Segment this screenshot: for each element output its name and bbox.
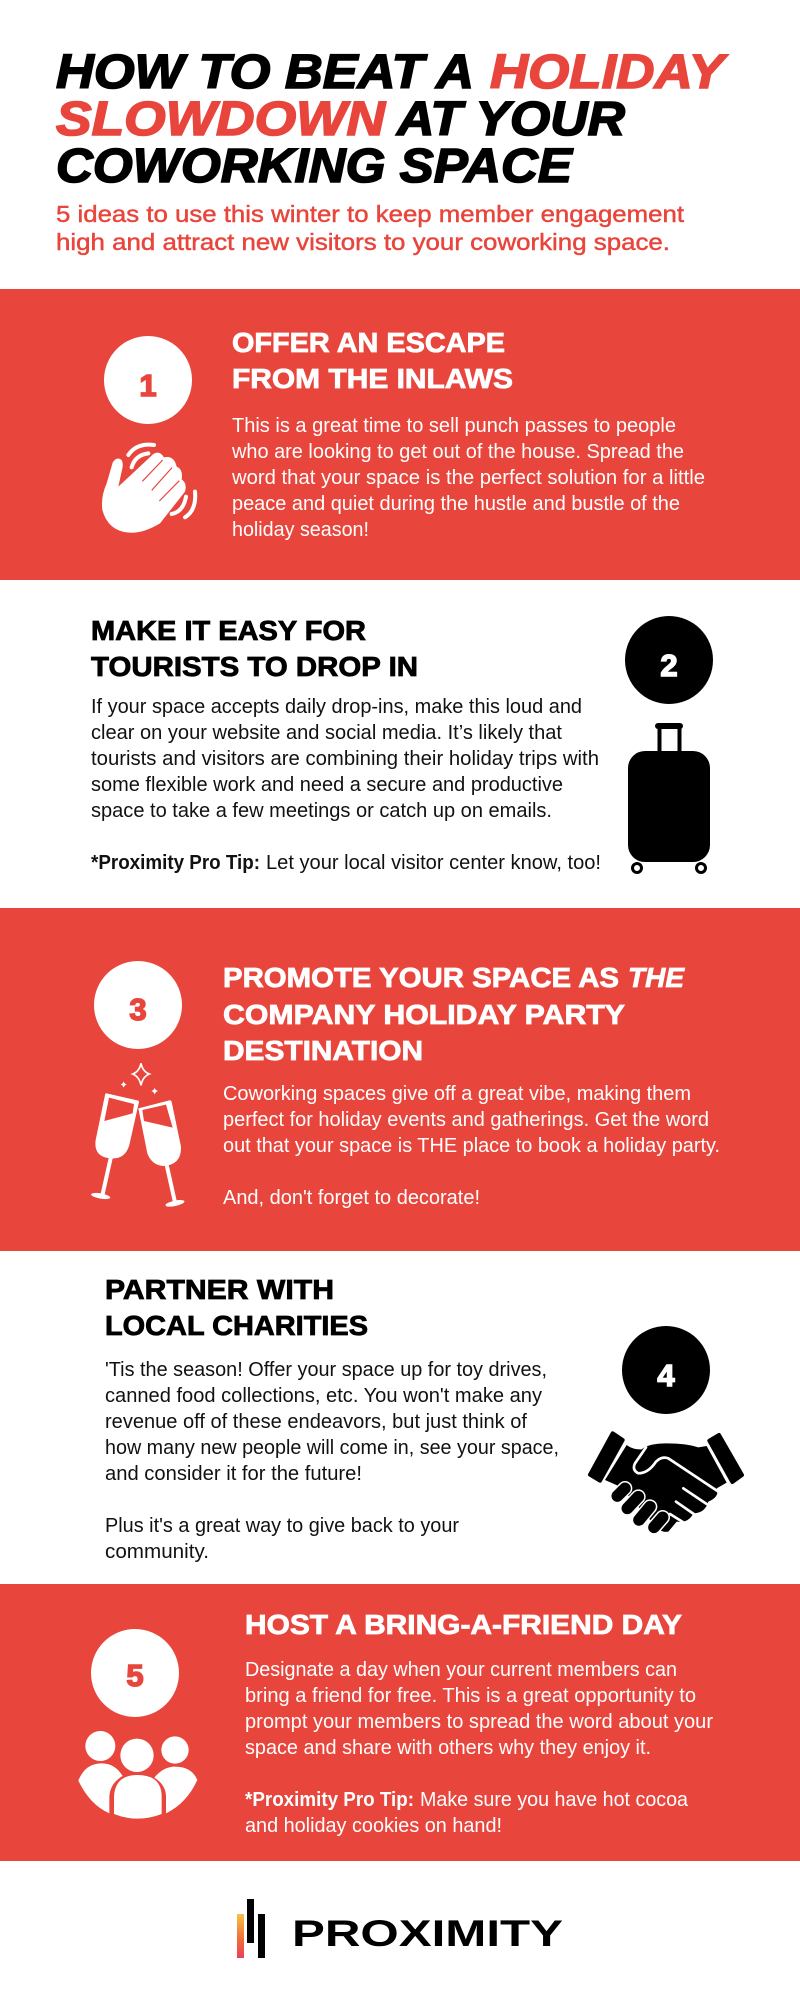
- heading: PARTNER WITH: [105, 1274, 334, 1305]
- body text: revenue off of these endeavors, but just think of: [105, 1410, 527, 1433]
- body text: holiday season!: [232, 518, 369, 541]
- heading: FROM THE INLAWS: [232, 363, 513, 394]
- pro tip: [245, 1788, 689, 1837]
- icon: champagne glasses: [91, 1063, 185, 1208]
- body text: perfect for holiday events and gatherings. Get the word: [223, 1108, 709, 1131]
- body text: And, don't forget to decorate!: [223, 1186, 480, 1209]
- number badge 4: 4: [657, 1358, 675, 1393]
- number badge 1: [104, 336, 192, 424]
- icon: waving hand: [102, 445, 195, 533]
- pro tip: *Proximity Pro Tip:: [245, 1788, 414, 1811]
- number badge 1: 1: [139, 368, 157, 403]
- heading: THE: [628, 962, 686, 993]
- heading: PROMOTE YOUR SPACE AS: [223, 962, 619, 993]
- body text: Designate a day when your current members can: [245, 1658, 677, 1681]
- number badge 3: 3: [129, 992, 147, 1027]
- body text: tourists and visitors are combining their holiday trips with: [91, 747, 599, 770]
- number badge 5: 5: [126, 1658, 144, 1693]
- body text: [223, 1082, 720, 1209]
- heading: [91, 615, 418, 682]
- body text: [91, 695, 599, 822]
- panel: idea 5: [0, 1584, 800, 1861]
- body text: This is a great time to sell punch passes to people: [232, 414, 676, 437]
- panel: idea 2: [91, 615, 713, 874]
- heading: [232, 327, 513, 394]
- heading: [223, 962, 686, 1066]
- body text: Coworking spaces give off a great vibe, making them: [223, 1082, 691, 1105]
- number badge 5: [91, 1629, 179, 1717]
- heading: LOCAL CHARITIES: [105, 1310, 368, 1341]
- body text: 'Tis the season! Offer your space up for toy drives,: [105, 1358, 547, 1381]
- body text: peace and quiet during the hustle and bustle of the: [232, 492, 680, 515]
- icon: suitcase: [628, 723, 710, 872]
- body text: bring a friend for free. This is a great opportunity to: [245, 1684, 696, 1707]
- title: [56, 46, 728, 193]
- title: HOW TO BEAT A: [56, 46, 474, 99]
- heading: [105, 1274, 368, 1341]
- body text: space and share with others why they enjoy it.: [245, 1736, 651, 1759]
- subtitle: [56, 201, 685, 255]
- pro tip: [91, 851, 601, 874]
- heading: OFFER AN ESCAPE: [232, 327, 505, 358]
- body text: [231, 414, 705, 541]
- body text: who are looking to get out of the house. Spread the: [231, 440, 684, 463]
- body text: Plus it's a great way to give back to your: [105, 1514, 459, 1537]
- icon: group of people: [78, 1731, 197, 1819]
- body text: and consider it for the future!: [105, 1462, 362, 1485]
- logo: Proximity: [237, 1899, 563, 1958]
- pro tip: Let your local visitor center know, too!: [266, 851, 601, 874]
- body text: space to take a few meetings or catch up on emails.: [91, 799, 552, 822]
- title: COWORKING SPACE: [56, 140, 574, 193]
- body text: [245, 1658, 713, 1759]
- pro tip: Make sure you have hot cocoa: [420, 1788, 689, 1811]
- body text: some flexible work and need a secure and productive: [91, 773, 563, 796]
- body text: canned food collections, etc. You won't make any: [105, 1384, 543, 1407]
- subtitle: 5 ideas to use this winter to keep member engagement: [56, 201, 685, 227]
- title: HOLIDAY: [490, 46, 728, 99]
- panel: idea 1: [0, 289, 800, 580]
- heading: DESTINATION: [223, 1035, 423, 1066]
- heading: MAKE IT EASY FOR: [91, 615, 366, 646]
- number badge 4: [622, 1326, 710, 1414]
- pro tip: *Proximity Pro Tip:: [91, 851, 260, 874]
- body text: how many new people will come in, see your space,: [105, 1436, 559, 1459]
- icon: handshake: [590, 1433, 742, 1532]
- body text: [105, 1358, 559, 1563]
- panel: idea 4: [105, 1274, 742, 1563]
- heading: TOURISTS TO DROP IN: [91, 651, 418, 682]
- body text: community.: [105, 1540, 209, 1563]
- heading: HOST A BRING-A-FRIEND DAY: [245, 1609, 682, 1640]
- body text: word that your space is the perfect solution for a little: [231, 466, 705, 489]
- subtitle: high and attract new visitors to your coworking space.: [56, 229, 670, 255]
- number badge 2: 2: [660, 648, 678, 683]
- pro tip: and holiday cookies on hand!: [245, 1814, 502, 1837]
- logo: Proximity: PROXIMITY: [292, 1913, 563, 1954]
- body text: clear on your website and social media. It’s likely that: [91, 721, 562, 744]
- heading: COMPANY HOLIDAY PARTY: [223, 999, 625, 1030]
- panel: idea 3: [0, 908, 800, 1251]
- body text: prompt your members to spread the word about your: [245, 1710, 713, 1733]
- title: AT YOUR: [396, 93, 625, 146]
- number badge 2: [625, 616, 713, 704]
- body text: out that your space is THE place to book a holiday party.: [223, 1134, 720, 1157]
- body text: If your space accepts daily drop-ins, make this loud and: [91, 695, 582, 718]
- title: SLOWDOWN: [56, 93, 386, 146]
- number badge 3: [94, 961, 182, 1049]
